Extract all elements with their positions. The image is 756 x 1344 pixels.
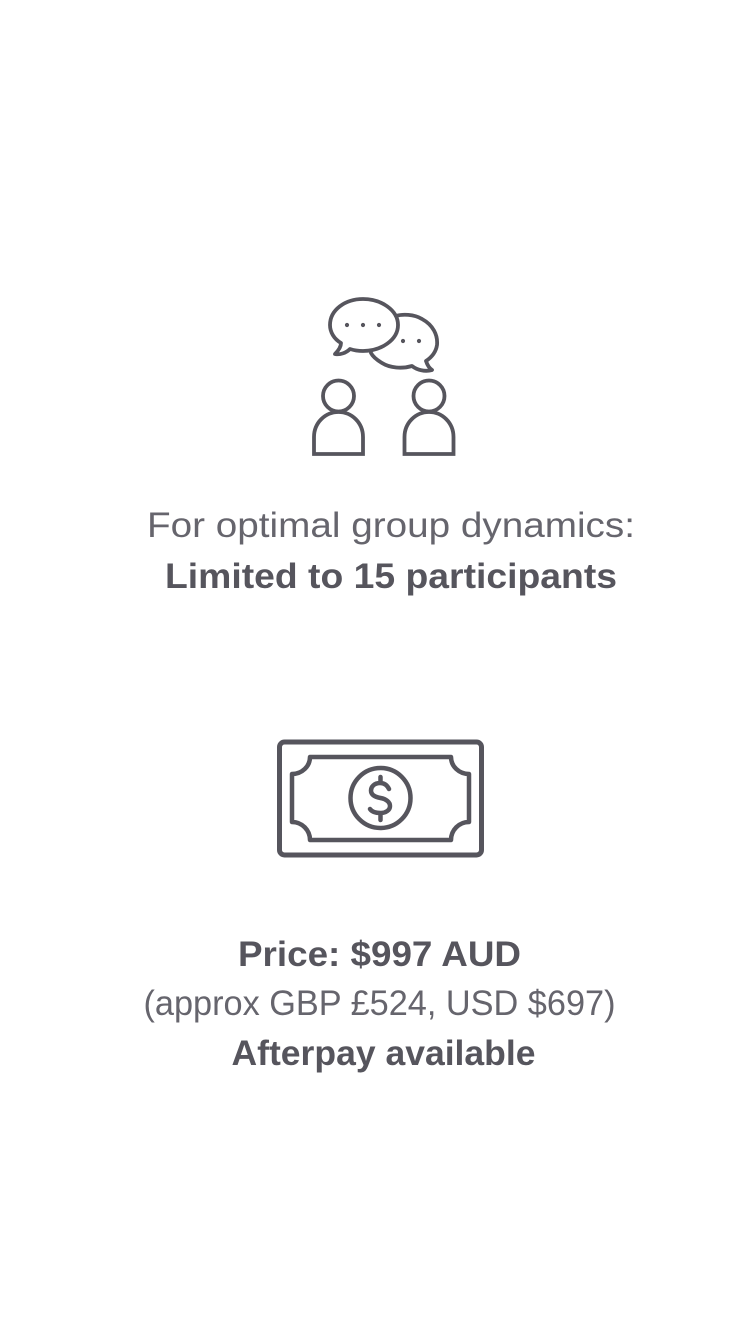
banknote coin bbox=[350, 768, 410, 828]
text: approximate conversions: (approx GBP £524, USD $697) bbox=[144, 984, 616, 1023]
text: participant limit: Limited to 15 participants bbox=[165, 557, 617, 596]
icon: left person bbox=[314, 380, 363, 454]
text: group size bbox=[147, 506, 635, 596]
banknote outer border bbox=[280, 742, 482, 855]
icon: left speech bubble bbox=[330, 299, 398, 354]
icon: banknote bbox=[280, 742, 482, 855]
banknote scalloped frame bbox=[292, 757, 469, 840]
icon: two people talking bbox=[314, 299, 454, 454]
text: group dynamics line: For optimal group dynamics: bbox=[147, 506, 635, 545]
text: price: Price: $997 AUD bbox=[238, 935, 521, 974]
text: price block bbox=[144, 935, 616, 1073]
icon: right person bbox=[404, 380, 454, 454]
icon: right speech bubble bbox=[371, 315, 437, 371]
dollar sign bbox=[370, 777, 390, 820]
text: afterpay: Afterpay available bbox=[232, 1034, 536, 1073]
